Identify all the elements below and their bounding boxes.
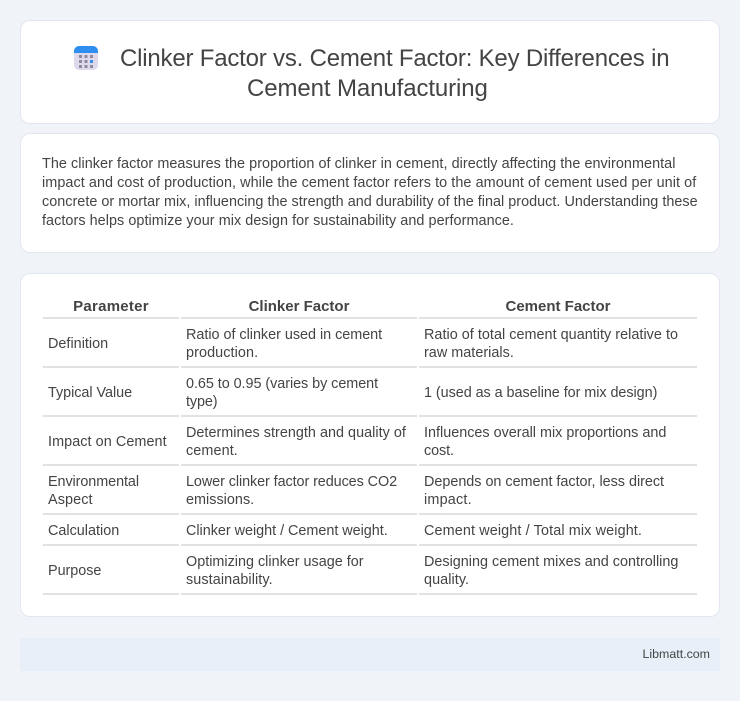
row: impact on cement: cost. [424,443,454,459]
row: impact on cement [48,425,666,459]
row: typical value: Typical Value [48,385,132,401]
intro paragraph: factors helps optimize your mix design for sustainability and performance. [42,213,514,229]
row: calculation [48,523,642,539]
title [120,45,669,102]
intro text panel [20,133,720,253]
table header: Cement Factor [505,298,611,315]
row: definition: raw materials. [424,345,514,361]
table header: Clinker Factor [249,298,349,315]
row: definition: production. [186,345,258,361]
row: environmental aspect: emissions. [186,492,254,508]
row: definition: Definition [48,336,108,352]
comparison table panel [20,273,720,617]
row: impact on cement: Determines strength and quality of [186,425,406,441]
row: purpose [48,554,678,588]
row: definition: Ratio of clinker used in cement [186,327,382,343]
row: purpose: sustainability. [186,572,273,588]
row: environmental aspect: impact. [424,492,472,508]
row: purpose: Designing cement mixes and controlling [424,554,678,570]
table header [73,298,611,315]
row: environmental aspect: Depends on cement factor, less direct [424,474,664,490]
footer text: Libmatt.com [643,647,710,661]
intro paragraph: impact and cost of production, while the cement factor refers to the amount of cement used per unit of [42,175,696,191]
row: purpose: Optimizing clinker usage for [186,554,364,570]
row: typical value: 1 (used as a baseline for mix design) [424,385,657,401]
row: purpose: quality. [424,572,469,588]
row: typical value: 0.65 to 0.95 (varies by cement [186,376,378,392]
row: calculation: Clinker weight / Cement weight. [186,523,388,539]
row: calculation: Cement weight / Total mix weight. [424,523,642,539]
row: impact on cement: Influences overall mix proportions and [424,425,666,441]
row: purpose: Purpose [48,563,101,579]
row: impact on cement: Impact on Cement [48,434,167,450]
intro paragraph: The clinker factor measures the proportion of clinker in cement, directly affecting the environmental [42,156,675,172]
row: environmental aspect: Lower clinker factor reduces CO2 [186,474,397,490]
row: environmental aspect [48,474,664,508]
header card [20,20,720,124]
row: definition [48,327,678,361]
intro paragraph: concrete or mortar mix, influencing the strength and durability of the final product. Understanding these [42,194,698,210]
title: Clinker Factor vs. Cement Factor: Key Differences in [120,45,669,72]
row: definition: Ratio of total cement quantity relative to [424,327,678,343]
footer bar [20,638,720,671]
row: impact on cement: cement. [186,443,238,459]
row: calculation: Calculation [48,523,119,539]
icon: calendar [74,46,98,70]
row: environmental aspect: Aspect [48,492,93,508]
row: typical value: type) [186,394,218,410]
table header: Parameter [73,298,149,315]
intro paragraph [42,156,698,229]
title: Cement Manufacturing [247,75,488,102]
row: typical value [48,376,657,410]
row: environmental aspect: Environmental [48,474,139,490]
